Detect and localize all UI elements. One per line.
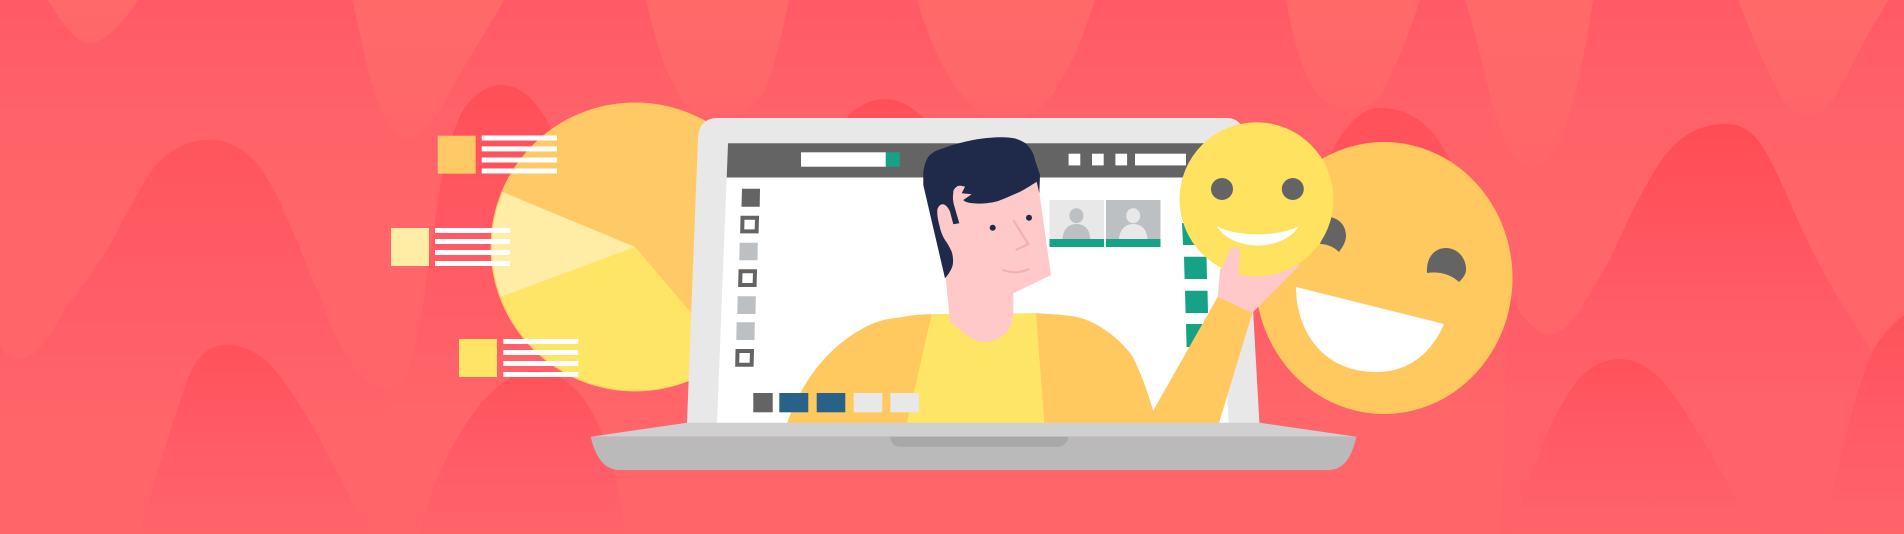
smiley right eye xyxy=(1282,178,1304,200)
small smiley mask xyxy=(1180,122,1334,276)
legend: pale item xyxy=(391,228,510,266)
large face: right eye xyxy=(1427,248,1466,282)
laptop base xyxy=(591,423,1356,470)
face details xyxy=(990,215,1032,272)
pie slice: yellow xyxy=(501,247,729,391)
large laughing face xyxy=(1256,142,1512,414)
jacket xyxy=(787,313,1157,423)
legend: yellow item xyxy=(459,339,578,377)
laptop screen xyxy=(717,143,1229,423)
smiley left eye xyxy=(1211,178,1233,200)
smiley mouth xyxy=(1216,226,1299,246)
video tile 2 xyxy=(1106,200,1160,247)
right teal blocks xyxy=(1182,223,1209,347)
large face: mouth xyxy=(1296,287,1444,372)
shirt xyxy=(907,313,1044,423)
trackpad notch xyxy=(890,437,1068,447)
laptop xyxy=(687,118,1259,423)
thumb xyxy=(1219,247,1240,298)
large face: left eye xyxy=(1320,217,1346,252)
video tile 1 xyxy=(1050,200,1104,247)
bottom toolbar squares xyxy=(753,393,919,412)
palm xyxy=(1218,250,1300,313)
screen top bar xyxy=(727,143,1217,178)
person xyxy=(787,137,1300,423)
pie slice: pale xyxy=(492,192,635,297)
sidebar icons xyxy=(736,189,760,365)
legend: orange item xyxy=(438,136,557,174)
hair xyxy=(923,137,1040,278)
laptop lid xyxy=(687,118,1259,423)
neck and face xyxy=(934,178,1051,342)
raised arm xyxy=(1146,297,1252,423)
pie chart xyxy=(490,102,780,392)
